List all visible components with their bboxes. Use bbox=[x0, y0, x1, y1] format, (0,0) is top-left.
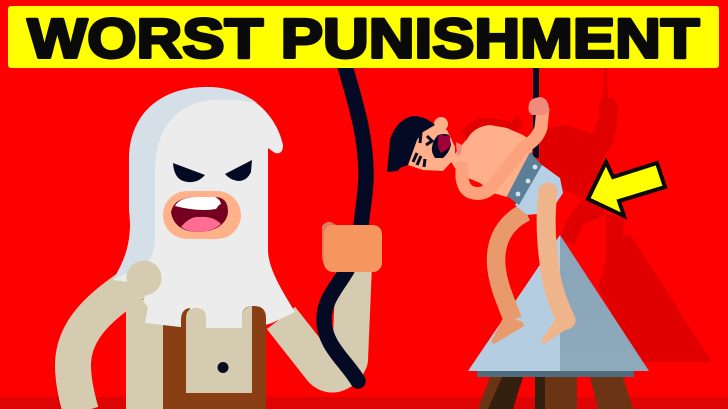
floor bbox=[0, 397, 728, 409]
front leg bbox=[546, 192, 566, 320]
eye marks bbox=[413, 133, 432, 167]
bib bbox=[186, 320, 252, 393]
back leg bbox=[496, 212, 526, 320]
body bbox=[126, 300, 266, 409]
title: WORST PUNISHMENT bbox=[28, 6, 700, 70]
hand bbox=[322, 222, 336, 271]
shorts bbox=[515, 165, 563, 215]
pyramid bbox=[468, 235, 649, 409]
pyramid legs bbox=[478, 377, 502, 409]
yellow arrow bbox=[588, 162, 665, 216]
overall straps over hood bbox=[181, 306, 266, 335]
neck bbox=[450, 140, 470, 168]
head bbox=[408, 125, 455, 171]
screaming mouth bbox=[432, 134, 451, 158]
prisoner bbox=[387, 97, 576, 344]
hood shade bbox=[113, 87, 257, 280]
right arm bbox=[281, 265, 354, 375]
button bbox=[218, 362, 228, 373]
arm bent across the torso bbox=[462, 108, 543, 194]
mouth bbox=[163, 191, 241, 239]
executioner bbox=[73, 87, 382, 409]
raised fist bbox=[126, 260, 162, 296]
title banner bbox=[8, 6, 719, 70]
belt bbox=[507, 152, 542, 205]
torso bbox=[455, 125, 533, 197]
gripping hand bbox=[528, 97, 549, 115]
hair bbox=[387, 116, 435, 172]
rope bbox=[533, 68, 539, 158]
tongue bbox=[456, 142, 462, 157]
hood bbox=[113, 87, 295, 328]
eyes bbox=[173, 163, 205, 182]
shadow of prisoner and pyramid bbox=[462, 66, 712, 362]
overalls bbox=[163, 320, 266, 409]
pyramid base bbox=[477, 371, 634, 377]
lower whip over arm bbox=[324, 270, 358, 381]
whip bbox=[345, 66, 366, 228]
raised arm bbox=[73, 278, 143, 409]
belt studs bbox=[516, 165, 537, 196]
